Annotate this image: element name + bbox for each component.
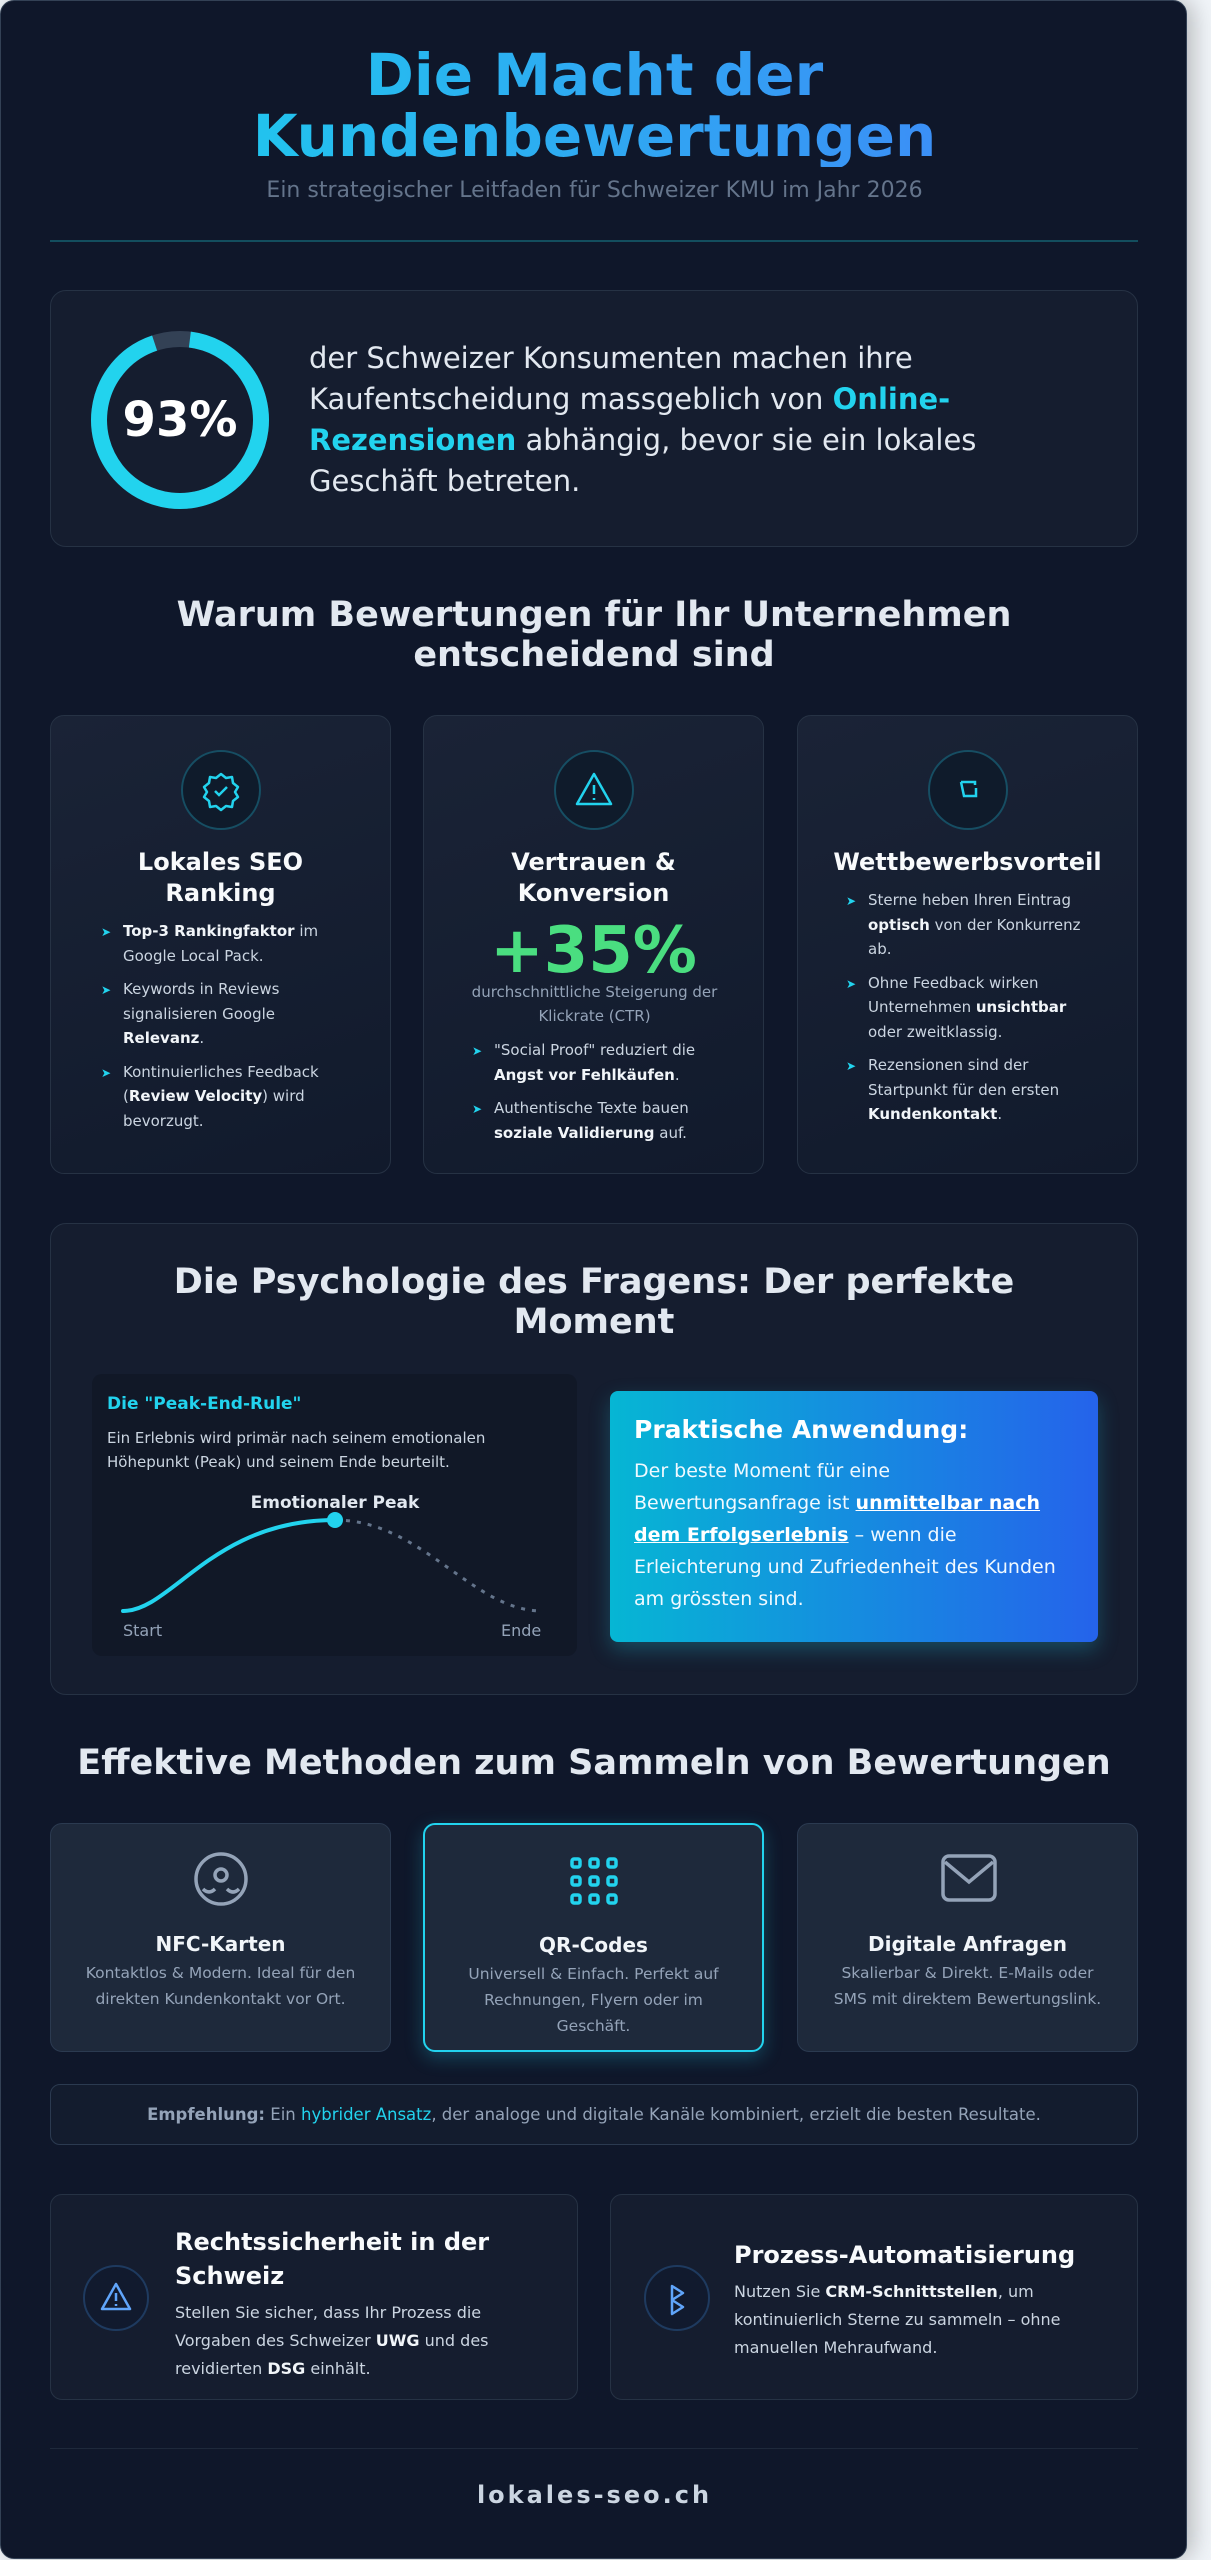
icon: google g <box>928 750 1008 830</box>
peak-end box: Die "Peak-End-Rule" <box>107 1394 301 1414</box>
callout: empfehlung: Empfehlung: Ein hybrider Ansatz, der analoge und digitale Kanäle kombiniert, erzielt die besten Resultate. <box>147 2105 1041 2124</box>
card: Lokales SEO: Keywords in Reviews signalisieren Google Relevanz. <box>123 980 279 1047</box>
heading: Die Psychologie des Fragens: Der perfekte <box>174 1262 1014 1302</box>
title: Die Macht der <box>366 41 823 109</box>
card: digital: Skalierbar & Direkt. E-Mails oder SMS mit direktem Bewertungslink. <box>834 1964 1101 2008</box>
card: Wettbewerb: Rezensionen sind der Startpunkt für den ersten Kundenkontakt. <box>868 1056 1059 1123</box>
heading: methoden: Effektive Methoden zum Sammeln von Bewertungen <box>77 1743 1111 1783</box>
card: QR: Universell & Einfach. Perfekt auf Rechnungen, Flyern oder im Geschäft. <box>468 1965 719 2035</box>
subtitle: Ein strategischer Leitfaden für Schweizer KMU im Jahr 2026 <box>266 178 923 203</box>
icon: badge check <box>181 750 261 830</box>
heading: warum <box>177 595 1011 675</box>
card: digital: Digitale Anfragen <box>868 1932 1067 1956</box>
icon: warning <box>554 750 634 830</box>
icon: automation <box>644 2265 710 2331</box>
peak-end box <box>92 1374 577 1656</box>
card: Wettbewerb <box>797 715 1138 1174</box>
card: Automatisierung: Prozess-Automatisierung <box>734 2241 1075 2269</box>
card: Wettbewerb: Sterne heben Ihren Eintrag optisch von der Konkurrenz ab. <box>868 891 1080 958</box>
icon: warning <box>83 2265 149 2331</box>
card: Automatisierung <box>610 2194 1138 2400</box>
heading <box>174 1262 1014 1342</box>
card: Vertrauen: durchschnittliche Steigerung der Klickrate (CTR) <box>472 983 717 1025</box>
card: Wettbewerb: Ohne Feedback wirken Unternehmen unsichtbar oder zweitklassig. <box>868 974 1066 1040</box>
card: Rechtssicherheit <box>50 2194 578 2400</box>
heading: warum: entscheidend sind <box>413 635 775 675</box>
card: Vertrauen: Konversion <box>518 879 669 907</box>
icon: mail <box>941 1854 997 1902</box>
chart: peak curve: Emotionaler Peak <box>251 1493 420 1513</box>
card: Lokales SEO: Lokales SEO <box>138 848 303 876</box>
chart: peak curve: Ende <box>501 1621 541 1640</box>
peak-end box: Ein Erlebnis wird primär nach seinem emotionalen Höhepunkt (Peak) und seinem Ende beurteilt. <box>107 1429 485 1471</box>
card: Lokales SEO <box>50 715 391 1174</box>
card: Vertrauen: Vertrauen & <box>511 848 676 876</box>
card: NFC: Kontaktlos & Modern. Ideal für den direkten Kundenkontakt vor Ort. <box>86 1964 355 2008</box>
panel: psychology <box>50 1223 1138 1695</box>
chart: donut 93%: 93% <box>123 392 237 448</box>
panel: stat 93% <box>50 290 1138 547</box>
card: NFC: NFC-Karten <box>155 1932 286 1956</box>
callout: praktische anwendung: Der beste Moment für eine Bewertungsanfrage ist unmittelbar nach dem Erfolgserlebnis – wenn die Erleichterung und Zufriedenheit des Kunden am grössten sind. <box>634 1460 1056 1610</box>
card: Vertrauen: Authentische Texte bauen soziale Validierung auf. <box>494 1099 689 1142</box>
card: Rechtssicherheit: Stellen Sie sicher, dass Ihr Prozess die Vorgaben des Schweizer UWG und des revidierten DSG einhält. <box>175 2303 489 2378</box>
card: Automatisierung: Nutzen Sie CRM-Schnittstellen, um kontinuierlich Sterne zu sammeln – ohne manuellen Mehraufwand. <box>734 2282 1060 2357</box>
card: QR: QR-Codes <box>539 1933 648 1957</box>
card: Wettbewerb: Wettbewerbsvorteil <box>833 848 1102 876</box>
card: Vertrauen <box>423 715 764 1174</box>
card: Lokales SEO: Kontinuierliches Feedback (Review Velocity) wird bevorzugt. <box>123 1062 319 1130</box>
card: QR <box>423 1823 764 2052</box>
title: Kundenbewertungen <box>253 102 936 170</box>
icon: qr grid <box>570 1857 618 1905</box>
card: Lokales SEO: Top-3 Rankingfaktor im Google Local Pack. <box>123 922 318 964</box>
stat text: der Schweizer Konsumenten machen ihre Kaufentscheidung massgeblich von Online-Rezensionen abhängig, bevor sie ein lokales Geschäft betreten. <box>309 341 976 498</box>
footer: lokales-seo.ch <box>477 2481 712 2509</box>
stat +35%: +35% <box>490 914 697 988</box>
chart: donut 93% <box>91 331 269 509</box>
icon: nfc <box>194 1852 248 1906</box>
card: Rechtssicherheit: Rechtssicherheit in der Schweiz <box>175 2228 489 2290</box>
chart: peak curve: Start <box>123 1621 162 1640</box>
callout: praktische anwendung: Praktische Anwendung: <box>634 1415 968 1444</box>
callout: praktische anwendung <box>610 1391 1098 1642</box>
title <box>253 41 936 170</box>
card: Lokales SEO: Ranking <box>165 879 276 907</box>
card: Vertrauen: "Social Proof" reduziert die Angst vor Fehlkäufen. <box>494 1041 695 1084</box>
card: NFC <box>50 1823 391 2052</box>
chart: peak curve <box>121 1493 541 1640</box>
card: digital <box>797 1823 1138 2052</box>
callout: empfehlung <box>50 2084 1138 2145</box>
heading: Moment <box>514 1302 674 1342</box>
heading: warum: Warum Bewertungen für Ihr Unternehmen <box>177 595 1011 635</box>
